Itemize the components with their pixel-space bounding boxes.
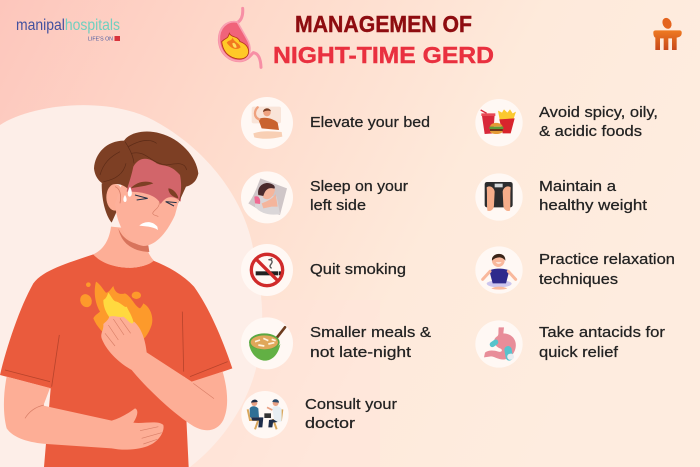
label: Avoid spicy, oily, xyxy=(539,104,658,121)
finger and arm creases xyxy=(25,318,214,444)
item: relaxation techniques xyxy=(475,246,675,294)
label: quick relief xyxy=(539,344,619,361)
label: doctor xyxy=(305,415,355,432)
label xyxy=(539,251,675,288)
label: left side xyxy=(310,197,366,214)
item: elevate your bed xyxy=(241,97,430,149)
label xyxy=(310,324,431,361)
icon: person on raised bed xyxy=(241,97,293,149)
logo: Manipal Hospitals: LIFE'S ON xyxy=(88,36,113,42)
label: not late-night xyxy=(310,344,412,361)
label: healthy weight xyxy=(539,197,648,214)
left arm and lower hand xyxy=(4,377,164,450)
label: Consult your xyxy=(305,396,397,413)
icon: no smoking sign xyxy=(241,244,293,296)
logo: Manipal Hospitals: manipalhospitals xyxy=(16,17,120,34)
label xyxy=(305,396,397,432)
closed eyes xyxy=(135,195,177,206)
item: consult your doctor xyxy=(241,391,397,438)
title xyxy=(273,11,494,68)
logo: Manipal Hospitals xyxy=(16,17,120,42)
icon: feet on scale xyxy=(475,173,523,221)
label: techniques xyxy=(539,271,618,288)
right arm and hand on chest xyxy=(101,316,227,430)
head and hair xyxy=(94,131,198,246)
tears xyxy=(123,187,132,202)
label xyxy=(539,104,658,140)
icon: bowl of food xyxy=(241,317,293,369)
eyebrows xyxy=(131,182,178,198)
nose xyxy=(153,202,159,217)
label: Maintain a xyxy=(539,178,617,195)
title: MANAGEMEN OF xyxy=(295,11,472,37)
item: take antacids xyxy=(475,320,665,368)
icon: meditating boy xyxy=(475,246,523,294)
icon: burning stomach xyxy=(219,8,261,67)
t-shirt xyxy=(0,254,232,467)
illustration: man with heartburn xyxy=(0,131,232,467)
item: quit smoking xyxy=(241,244,406,296)
logo: Manipal emblem xyxy=(653,16,682,50)
label: Practice relaxation xyxy=(539,251,675,268)
item: smaller meals xyxy=(241,317,431,369)
neck shadow xyxy=(118,228,149,252)
label: Take antacids for xyxy=(539,324,665,341)
mouth xyxy=(139,222,158,230)
pale circle behind person xyxy=(0,105,262,467)
icon: doctor and patient xyxy=(241,391,289,438)
label: Quit smoking xyxy=(310,261,406,278)
item: sleep on your left side xyxy=(241,171,408,223)
label: Smaller meals & xyxy=(310,324,431,341)
neck xyxy=(93,227,154,268)
icon: fast food xyxy=(475,99,523,146)
item: avoid spicy foods xyxy=(475,99,658,146)
title: NIGHT-TIME GERD xyxy=(273,42,494,68)
label xyxy=(539,178,648,214)
label xyxy=(539,324,665,361)
item: healthy weight xyxy=(475,173,648,221)
sleeve folds xyxy=(5,312,228,387)
label: Sleep on your xyxy=(310,178,408,195)
icon: woman sleeping on left side xyxy=(241,171,293,223)
label: Elevate your bed xyxy=(310,114,430,131)
icon: stomach with capsules xyxy=(475,320,523,368)
label: & acidic foods xyxy=(539,123,642,140)
background lower glow xyxy=(180,300,380,467)
flames on chest xyxy=(78,282,152,342)
label xyxy=(310,178,408,214)
